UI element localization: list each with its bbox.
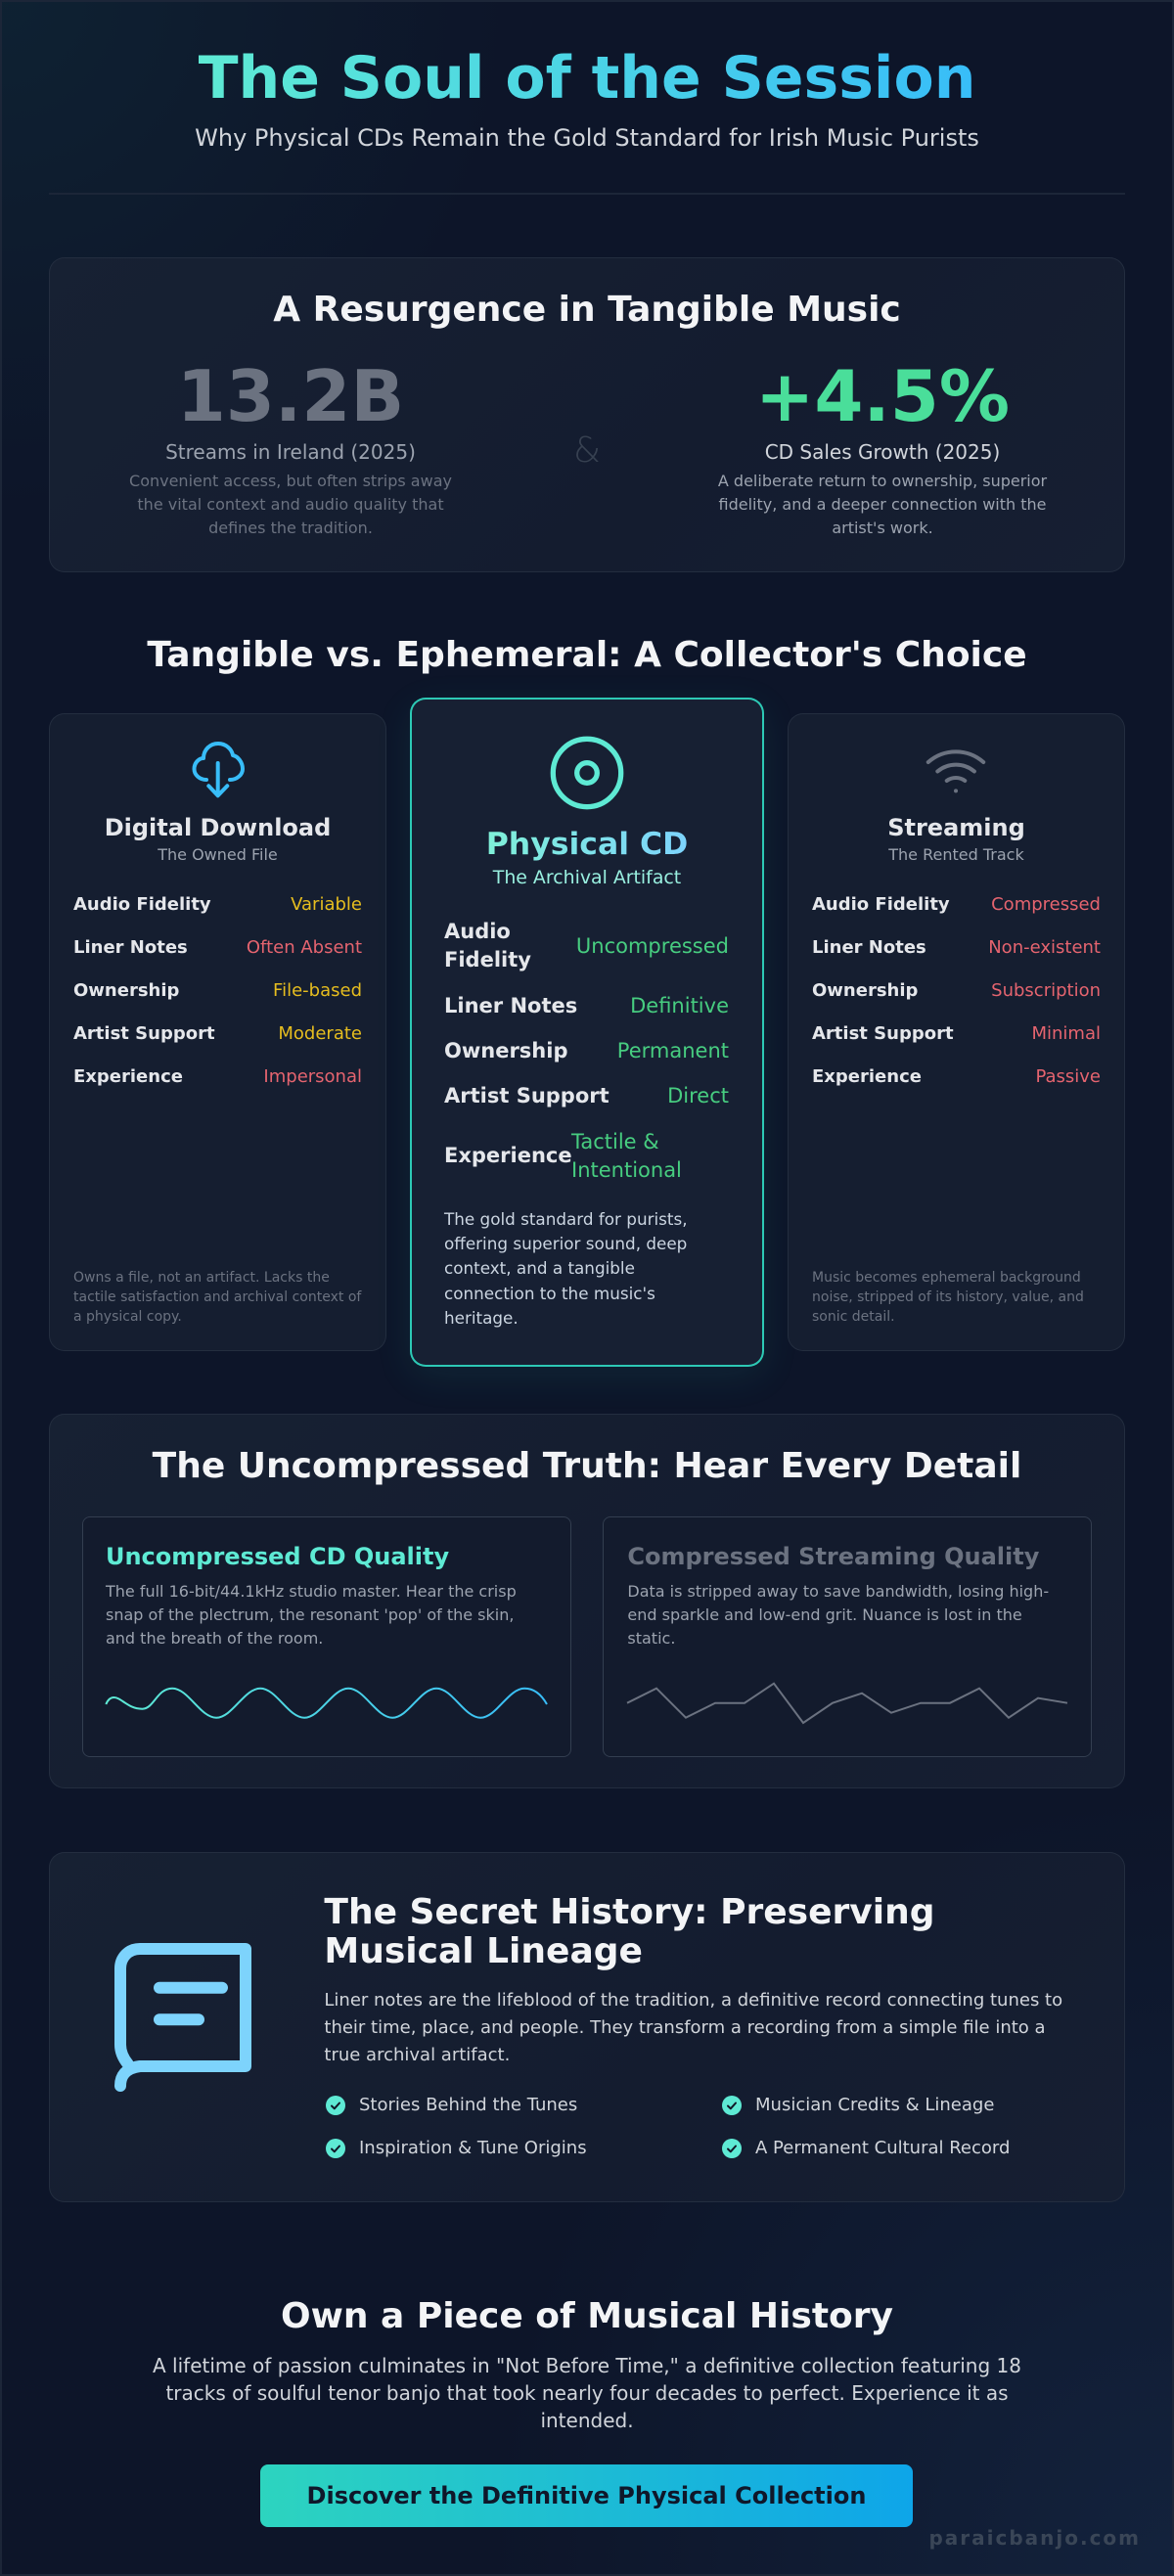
panel: digital download	[49, 713, 386, 1351]
heading: secret history: The Secret History: Preserving	[324, 1892, 934, 1931]
call to action text	[153, 2354, 1021, 2432]
panel: physical CD: Liner Notes	[444, 994, 577, 1017]
comparison rows: Experience	[812, 1066, 922, 1087]
comparison rows: Audio	[444, 920, 511, 943]
chart: jagged waveform	[626, 1683, 1068, 1724]
panel: physical CD	[410, 698, 764, 1367]
comparison rows: Moderate	[278, 1023, 362, 1044]
panel: physical CD: Ownership	[444, 1039, 567, 1062]
card note: noise, stripped of its history, value, and	[812, 1289, 1084, 1305]
heading: comparison: Tangible vs. Ephemeral: A Collector's Choice	[147, 634, 1027, 675]
comparison rows: Variable	[291, 894, 362, 915]
heading: secret history	[324, 1892, 934, 1970]
panel: secret history	[49, 1852, 1125, 2202]
card note: connection to the music's	[444, 1284, 655, 1303]
comparison rows: Audio Fidelity	[73, 894, 211, 915]
stat description: CD sales: fidelity, and a deeper connection with the	[718, 495, 1047, 514]
comparison rows	[73, 894, 362, 1087]
comparison rows: Artist Support	[812, 1023, 954, 1044]
card title: Physical CD	[486, 826, 688, 861]
comparison rows: File-based	[273, 980, 362, 1001]
heading: CD quality: Uncompressed CD Quality	[106, 1543, 449, 1570]
stat description: CD sales	[718, 472, 1047, 537]
card title: Streaming	[887, 814, 1025, 841]
description: liner notes: their time, place, and people. They transform a recording from a simple file into a	[324, 2017, 1046, 2038]
button	[260, 2464, 913, 2527]
comparison rows: Ownership	[73, 980, 179, 1001]
description: CD quality: snap of the plectrum, the resonant 'pop' of the skin,	[106, 1605, 514, 1624]
heading: streaming quality: Compressed Streaming Quality	[627, 1543, 1039, 1570]
button: Discover the Definitive Physical Collection	[307, 2482, 866, 2509]
comparison rows: Uncompressed	[576, 934, 729, 958]
card note: Music becomes ephemeral background	[812, 1270, 1081, 1286]
title: The Soul of the Session	[199, 44, 975, 113]
card title: Digital Download	[105, 814, 331, 841]
chart: smooth waveform	[105, 1687, 548, 1719]
panel: physical CD: Definitive	[630, 994, 729, 1017]
stat description: CD sales: artist's work.	[832, 519, 933, 537]
comparison rows: Impersonal	[263, 1066, 362, 1087]
check item: Musician Credits & Lineage	[755, 2095, 994, 2115]
panel: physical CD: Experience	[444, 1144, 572, 1167]
comparison rows: Subscription	[991, 980, 1101, 1001]
comparison rows: Compressed	[991, 894, 1101, 915]
card note: a physical copy.	[73, 1309, 182, 1325]
card note	[73, 1270, 362, 1325]
subtitle: Why Physical CDs Remain the Gold Standard for Irish Music Purists	[195, 124, 979, 152]
card subtitle: The Archival Artifact	[493, 867, 681, 888]
panel: CD quality	[82, 1516, 571, 1757]
card subtitle: The Rented Track	[888, 845, 1024, 864]
icon: speech bubble	[114, 1943, 251, 2092]
panel: streaming	[788, 713, 1125, 1351]
stat description: CD sales: A deliberate return to ownership, superior	[718, 472, 1047, 490]
comparison rows: Passive	[1035, 1066, 1101, 1087]
card note: context, and a tangible	[444, 1258, 635, 1278]
panel: physical CD: Direct	[667, 1084, 729, 1107]
heading: uncompressed truth: The Uncompressed Truth: Hear Every Detail	[153, 1446, 1021, 1485]
card note	[444, 1209, 688, 1328]
description: liner notes: Liner notes are the lifeblood of the tradition, a definitive record connecting tunes to	[324, 1990, 1062, 2011]
comparison rows: Fidelity	[444, 948, 531, 972]
card note: offering superior sound, deep	[444, 1234, 687, 1253]
comparison rows: Liner Notes	[73, 937, 188, 958]
description: streaming quality	[627, 1582, 1049, 1648]
heading: secret history: Musical Lineage	[324, 1931, 643, 1970]
check item: Inspiration & Tune Origins	[359, 2138, 587, 2158]
description: liner notes: true archival artifact.	[324, 2045, 510, 2065]
description: liner notes	[324, 1990, 1062, 2065]
check item: Stories Behind the Tunes	[359, 2095, 577, 2115]
stat number: +4.5%: +4.5%	[755, 354, 1010, 436]
icon: cloud download	[192, 742, 245, 798]
panel: physical CD: Permanent	[617, 1039, 729, 1062]
heading: call to action: Own a Piece of Musical History	[281, 2296, 893, 2336]
check item: A Permanent Cultural Record	[755, 2138, 1010, 2158]
panel: uncompressed truth	[49, 1414, 1125, 1788]
description: streaming quality: end sparkle and low-end grit. Nuance is lost in the	[627, 1605, 1022, 1624]
description: streaming quality: static.	[627, 1629, 675, 1648]
stat: streams	[129, 354, 452, 537]
heading: resurgence: A Resurgence in Tangible Music	[273, 290, 901, 330]
card subtitle: The Owned File	[158, 845, 278, 864]
stat number: 13.2B: 13.2B	[177, 354, 404, 436]
call to action text: tracks of soulful tenor banjo that took nearly four decades to perfect. Experience it as	[165, 2381, 1009, 2405]
stat label: streams: Streams in Ireland (2025)	[165, 440, 416, 464]
stat description: streams: defines the tradition.	[208, 519, 373, 537]
panel: streaming quality	[603, 1516, 1092, 1757]
description: CD quality	[106, 1582, 517, 1648]
call to action text: intended.	[540, 2409, 634, 2432]
comparison rows: Experience	[73, 1066, 183, 1087]
stat description: streams: Convenient access, but often strips away	[129, 472, 452, 490]
comparison rows: Artist Support	[73, 1023, 215, 1044]
watermark: paraicbanjo.com	[928, 2526, 1141, 2550]
card note: tactile satisfaction and archival context of	[73, 1289, 361, 1305]
panel: resurgence stats	[49, 257, 1125, 572]
checklist	[326, 2095, 1010, 2158]
description: CD quality: The full 16-bit/44.1kHz studio master. Hear the crisp	[106, 1582, 517, 1601]
ampersand: &	[573, 430, 601, 471]
description: streaming quality: Data is stripped away to save bandwidth, losing high-	[627, 1582, 1049, 1601]
stat description: streams	[129, 472, 452, 537]
card note: The gold standard for purists,	[444, 1209, 688, 1229]
panel: physical CD: Tactile &	[571, 1130, 659, 1153]
stat: CD sales	[718, 354, 1047, 537]
stat description: streams: the vital context and audio quality that	[137, 495, 444, 514]
comparison rows: Often Absent	[247, 937, 362, 958]
card note: sonic detail.	[812, 1309, 895, 1325]
card note: Owns a file, not an artifact. Lacks the	[73, 1270, 330, 1286]
comparison rows	[812, 894, 1101, 1087]
comparison rows: Audio Fidelity	[812, 894, 950, 915]
comparison rows: Minimal	[1031, 1023, 1101, 1044]
icon: disc	[550, 736, 624, 810]
panel: physical CD: Intentional	[571, 1158, 682, 1182]
comparison rows: Liner Notes	[812, 937, 926, 958]
description: CD quality: and the breath of the room.	[106, 1629, 323, 1648]
stat label: CD sales: CD Sales Growth (2025)	[765, 440, 1000, 464]
panel: physical CD: Artist Support	[444, 1084, 610, 1107]
comparison rows	[444, 920, 729, 1182]
icon: wifi	[926, 749, 986, 792]
card note	[812, 1270, 1084, 1325]
card note: heritage.	[444, 1308, 519, 1328]
call to action text: A lifetime of passion culminates in "Not Before Time," a definitive collection featuring 18	[153, 2354, 1021, 2377]
comparison rows: Non-existent	[988, 937, 1101, 958]
comparison rows: Ownership	[812, 980, 918, 1001]
